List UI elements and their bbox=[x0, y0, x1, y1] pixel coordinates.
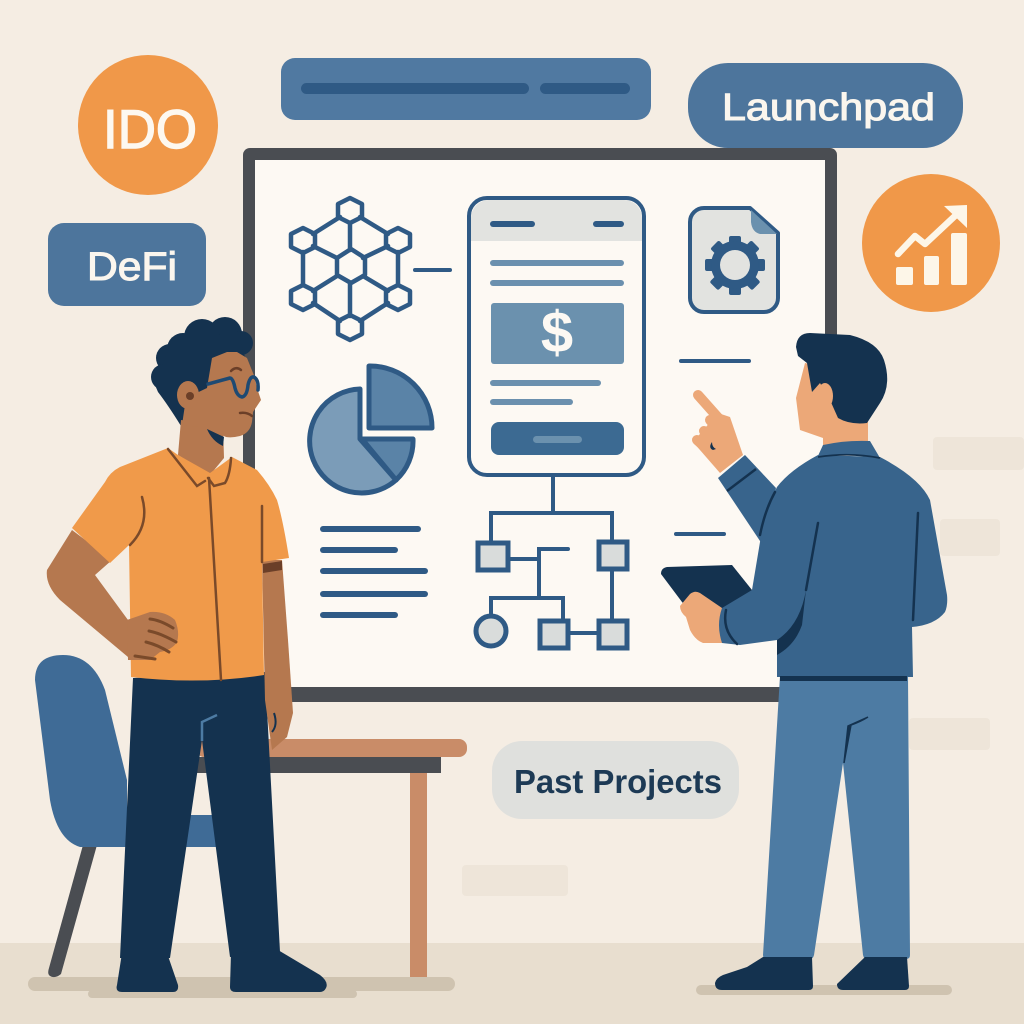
pants crease bbox=[202, 715, 217, 741]
pants bbox=[763, 676, 910, 959]
chair seat bbox=[120, 815, 220, 847]
neck bbox=[178, 420, 224, 475]
left shoe bbox=[715, 957, 813, 990]
right hand finger lines bbox=[272, 713, 276, 732]
sleeve cuff line bbox=[727, 469, 756, 491]
jacket folds bbox=[725, 492, 918, 644]
header dashes bbox=[490, 221, 624, 227]
ear detail bbox=[186, 392, 194, 400]
right arm bbox=[262, 560, 293, 750]
icon: hexagon network bbox=[291, 198, 410, 340]
raised arm sleeve bbox=[718, 455, 776, 544]
floor shadows bbox=[28, 977, 952, 998]
chair leg bbox=[48, 845, 97, 977]
neck and face bbox=[796, 363, 868, 452]
dollar sign: $ bbox=[541, 300, 573, 365]
jacket bbox=[719, 455, 947, 677]
tablet bbox=[661, 565, 752, 610]
chair back bbox=[35, 655, 127, 847]
hair bbox=[151, 317, 253, 426]
board surface bbox=[255, 160, 825, 687]
table top bbox=[196, 739, 467, 757]
badge: DeFi: DeFi bbox=[87, 245, 177, 289]
presentation board bbox=[243, 148, 837, 702]
flowchart connectors bbox=[491, 513, 612, 633]
finger lines bbox=[135, 619, 176, 659]
short dash lower right bbox=[674, 532, 726, 536]
icon: settings document bbox=[690, 208, 778, 312]
eyebrow and mouth bbox=[231, 368, 252, 416]
badge: IDO: IDO bbox=[103, 98, 197, 160]
right shoe bbox=[230, 950, 327, 992]
hair bbox=[796, 333, 887, 423]
pants crease bbox=[844, 717, 868, 763]
content lines bbox=[490, 260, 624, 405]
connector dash bbox=[413, 268, 452, 272]
table apron bbox=[190, 757, 441, 773]
table leg bbox=[410, 770, 427, 977]
badge: Launchpad bbox=[688, 63, 963, 148]
neck shadow bbox=[207, 429, 224, 446]
shirt bbox=[72, 448, 289, 681]
icon: growth chart badge bbox=[862, 174, 1000, 312]
growth bars bbox=[896, 233, 967, 285]
arm under-shadow bbox=[777, 590, 806, 655]
head bbox=[182, 352, 261, 437]
text lines left bbox=[320, 526, 428, 618]
right shoe bbox=[837, 957, 909, 990]
left shoe bbox=[117, 953, 178, 992]
person left bbox=[47, 317, 327, 992]
pill bars bbox=[301, 83, 630, 94]
sleeve cuff bbox=[263, 561, 282, 573]
icon: flowchart bbox=[476, 513, 627, 648]
badge: Past Projects: Past Projects bbox=[514, 763, 722, 800]
badge: IDO bbox=[78, 55, 218, 195]
icon: pie chart bbox=[310, 366, 432, 493]
floor bbox=[0, 943, 1024, 1024]
finger detail bbox=[710, 442, 716, 450]
top pill bbox=[281, 58, 651, 120]
badge: Past Projects bbox=[492, 741, 739, 819]
phone header bbox=[471, 200, 642, 241]
arrow head bbox=[944, 205, 967, 228]
hem shadow bbox=[780, 676, 907, 681]
phone button bbox=[491, 422, 624, 455]
growth arrow bbox=[898, 215, 956, 254]
phone mockup bbox=[469, 198, 644, 475]
holding hand bbox=[680, 592, 726, 643]
document body bbox=[690, 208, 778, 312]
collar bbox=[817, 441, 880, 458]
document fold bbox=[751, 210, 777, 234]
badge: DeFi bbox=[48, 223, 206, 306]
raised hand bbox=[693, 395, 743, 473]
decorative wall blocks bbox=[462, 437, 1024, 896]
connector stem bbox=[551, 475, 555, 513]
board frame bbox=[243, 148, 837, 702]
person right bbox=[661, 333, 947, 990]
shirt details bbox=[130, 449, 262, 680]
collar shadow bbox=[818, 455, 880, 458]
badge: Launchpad: Launchpad bbox=[722, 87, 935, 129]
dollar card bbox=[491, 303, 624, 364]
glasses bbox=[208, 377, 258, 397]
flowchart nodes bbox=[476, 542, 627, 648]
short dash upper right bbox=[679, 359, 751, 363]
chair bbox=[35, 655, 220, 977]
button label bar bbox=[533, 436, 582, 443]
phone body bbox=[469, 198, 644, 475]
gear bbox=[705, 236, 765, 295]
pants bbox=[120, 672, 280, 958]
hand on hip bbox=[127, 612, 178, 660]
table bbox=[190, 739, 467, 977]
left arm bbox=[47, 530, 140, 657]
ear bbox=[817, 383, 833, 409]
ear bbox=[177, 381, 199, 409]
